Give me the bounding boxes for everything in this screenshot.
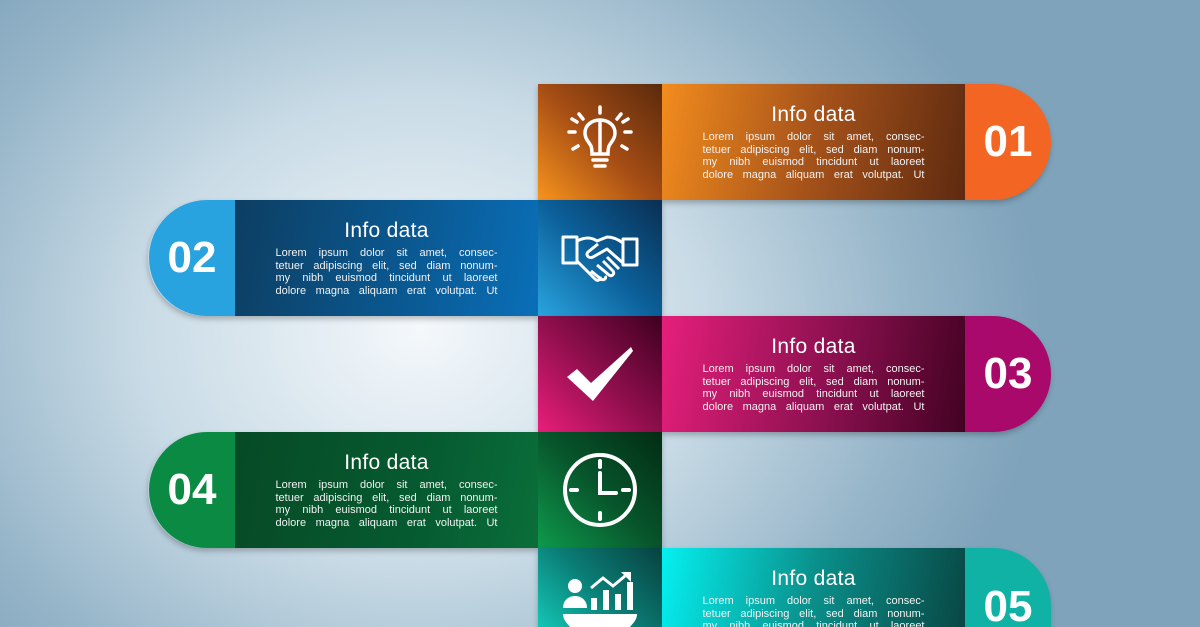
row 03 [538, 316, 1050, 432]
text 02: my nibh euismod tincidunt ut laoreet [276, 272, 498, 284]
text 04: my nibh euismod tincidunt ut laoreet [276, 504, 498, 516]
row 05 [538, 548, 1050, 627]
text 05: tetuer adipiscing elit, sed diam nonum- [702, 608, 924, 620]
text 02: Info data [344, 219, 429, 242]
text 03: dolore magna aliquam erat volutpat. Ut [702, 401, 924, 413]
text 05 [662, 548, 965, 627]
text 05: Info data [771, 567, 856, 590]
number 03 [965, 316, 1051, 432]
text 02: Lorem ipsum dolor sit amet, consec- [276, 247, 498, 259]
icon box 01: bulb brain [538, 84, 662, 200]
number 01 [965, 84, 1051, 200]
text 03: Info data [771, 335, 856, 358]
text 03: my nibh euismod tincidunt ut laoreet [702, 388, 924, 400]
text 04: Lorem ipsum dolor sit amet, consec- [276, 479, 498, 491]
text 03: Lorem ipsum dolor sit amet, consec- [702, 363, 924, 375]
text 04 [235, 432, 538, 548]
icon box 05: growth chart [538, 548, 662, 627]
icon box 03: check [538, 316, 662, 432]
text 01: Lorem ipsum dolor sit amet, consec- [702, 131, 924, 143]
text 01: dolore magna aliquam erat volutpat. Ut [702, 169, 924, 181]
text 01 [662, 84, 965, 200]
text 02: dolore magna aliquam erat volutpat. Ut [276, 285, 498, 297]
icon box 04: clock [538, 432, 662, 548]
text 04: dolore magna aliquam erat volutpat. Ut [276, 517, 498, 529]
text 03: tetuer adipiscing elit, sed diam nonum- [702, 376, 924, 388]
text 01: Info data [771, 103, 856, 126]
text 01: tetuer adipiscing elit, sed diam nonum- [702, 144, 924, 156]
number 05 [965, 548, 1051, 627]
row 02 [148, 200, 662, 316]
number 04 [149, 432, 235, 548]
text 04: tetuer adipiscing elit, sed diam nonum- [276, 492, 498, 504]
row 04 [148, 432, 662, 548]
text 03 [662, 316, 965, 432]
text 02: tetuer adipiscing elit, sed diam nonum- [276, 260, 498, 272]
number 03: 03 [984, 349, 1032, 398]
text 01: my nibh euismod tincidunt ut laoreet [702, 156, 924, 168]
number 02 [149, 200, 235, 316]
text 05: Lorem ipsum dolor sit amet, consec- [702, 595, 924, 607]
text 02 [235, 200, 538, 316]
text 04: Info data [344, 451, 429, 474]
number 01: 01 [984, 117, 1032, 166]
number 04: 04 [168, 465, 216, 514]
number 02: 02 [168, 233, 216, 282]
row 01 [538, 84, 1050, 200]
icon box 02: handshake [538, 200, 662, 316]
